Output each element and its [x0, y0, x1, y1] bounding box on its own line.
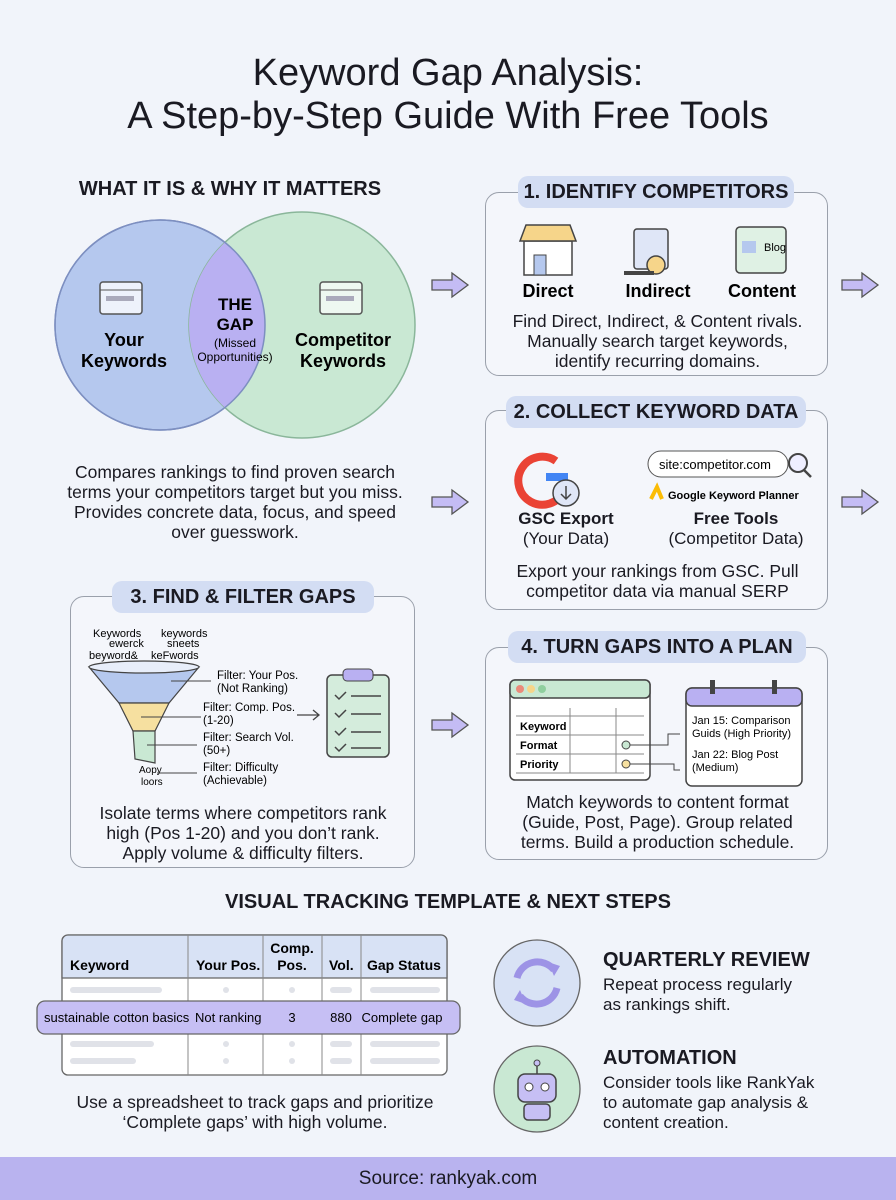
- funnel diagram: (Achievable): [203, 775, 267, 787]
- pill: step 4: [508, 631, 806, 663]
- heading: what it is: WHAT IT IS & WHY IT MATTERS: [79, 178, 381, 200]
- tracking table: 880: [330, 1010, 352, 1025]
- text: quarterly review: as rankings shift.: [603, 995, 731, 1014]
- panel: step 2: Free Tools: [694, 509, 778, 528]
- arrow 1: [431, 272, 469, 298]
- funnel diagram: keFwords: [151, 650, 199, 662]
- title: Keyword Gap Analysis:: [253, 52, 643, 94]
- icons: competitor types: Indirect: [625, 281, 691, 301]
- heading: tracking template: VISUAL TRACKING TEMPLATE & NEXT STEPS: [225, 891, 671, 913]
- venn diagram: Keywords: [81, 351, 167, 371]
- funnel diagram: Filter: Difficulty: [203, 762, 278, 774]
- venn diagram: Your: [104, 330, 144, 350]
- tracking table: Comp.: [270, 940, 314, 956]
- pill: step 2: 2. COLLECT KEYWORD DATA: [514, 401, 798, 423]
- icons: competitor types: Content: [728, 281, 796, 301]
- icons: competitor types: Direct: [522, 281, 574, 301]
- tracking table: Complete gap: [362, 1010, 442, 1025]
- pill: step 1: [518, 176, 794, 208]
- text: quarterly review: QUARTERLY REVIEW: [603, 949, 810, 971]
- funnel diagram: (50+): [203, 745, 230, 757]
- plan mockup: Priority: [520, 759, 559, 771]
- panel: step 2: Export your rankings from GSC. Pull competitor data via manual SERP: [516, 561, 799, 601]
- plan mockup: (Medium): [692, 762, 738, 774]
- pill: step 1: 1. IDENTIFY COMPETITORS: [524, 181, 788, 203]
- tracking table: [36, 934, 461, 1076]
- tracking table: Your Pos.: [196, 957, 260, 973]
- icon: automation robot: [493, 1045, 581, 1133]
- funnel diagram: (1-20): [203, 715, 234, 727]
- funnel diagram: keyword: [117, 660, 158, 672]
- panel: step 2: (Competitor Data): [668, 529, 804, 548]
- plan mockup: Guids (High Priority): [692, 728, 791, 740]
- funnel diagram: Filter: Comp. Pos.: [203, 702, 295, 714]
- plan mockup: Jan 15: Comparison: [692, 715, 790, 727]
- tracking table: Not ranking: [195, 1010, 261, 1025]
- funnel diagram: (Not Ranking): [217, 683, 288, 695]
- funnel diagram: Aopy: [139, 765, 162, 776]
- tracking table: Pos.: [277, 957, 307, 973]
- panel: step 3: Isolate terms where competitors rank high (Pos 1-20) and you don’t rank. Apply volume & difficulty filters.: [100, 803, 386, 863]
- plan mockup: Jan 22: Blog Post: [692, 749, 778, 761]
- funnel diagram: keywords: [161, 628, 208, 640]
- text: automation: [603, 1047, 814, 1132]
- funnel diagram: ewerck: [109, 638, 144, 650]
- icons: competitor types: Blog: [764, 242, 786, 254]
- icons: data sources: site:competitor.com: [659, 457, 771, 472]
- text: quarterly review: Repeat process regularly: [603, 975, 792, 994]
- arrow 5: [431, 712, 469, 738]
- venn diagram: GAP: [217, 315, 253, 334]
- arrow 3: [431, 488, 469, 516]
- panel: step 2: (Your Data): [523, 529, 609, 548]
- text: automation: content creation.: [603, 1113, 729, 1132]
- icon: quarterly review: [493, 939, 581, 1027]
- icons: data sources: Google Keyword Planner: [668, 490, 800, 502]
- panel: step 2: GSC Export: [518, 509, 614, 528]
- plan mockup: [509, 679, 803, 787]
- venn diagram: (Missed: [214, 336, 256, 350]
- funnel diagram: Filter: Search Vol.: [203, 732, 294, 744]
- panel: step 2: [485, 410, 828, 610]
- icons: data sources: [514, 450, 812, 509]
- text: definition: Compares rankings to find proven search terms your competitors target but you miss. Provides concrete data, focus, and speed over guesswork.: [67, 462, 403, 542]
- tracking table: sustainable cotton basics: [44, 1010, 190, 1025]
- arrow 2: [841, 272, 879, 298]
- funnel diagram: beyword&: [89, 650, 139, 662]
- panel: step 1: Find Direct, Indirect, & Content rivals.: [513, 311, 802, 331]
- pill: step 3: [112, 581, 374, 613]
- title: A Step-by-Step Guide With Free Tools: [127, 95, 769, 137]
- icons: competitor types: [519, 224, 796, 301]
- funnel diagram: Filter: Your Pos.: [217, 670, 298, 682]
- panel: step 1: [485, 192, 828, 376]
- panel: step 3: [70, 596, 415, 868]
- tracking table: Gap Status: [367, 957, 441, 973]
- footer: source: Source: rankyak.com: [359, 1168, 537, 1189]
- tracking table: Vol.: [329, 957, 354, 973]
- tracking table: Keyword: [70, 957, 129, 973]
- funnel diagram: sneets: [167, 638, 200, 650]
- plan mockup: Format: [520, 740, 558, 752]
- venn diagram: Competitor: [295, 330, 391, 350]
- arrow 4: [841, 488, 879, 516]
- funnel diagram: loors: [141, 777, 163, 788]
- panel: step 1: Manually search target keywords,: [527, 331, 788, 351]
- text: quarterly review: [603, 949, 810, 1014]
- text: automation: to automate gap analysis &: [603, 1093, 808, 1112]
- funnel diagram: Keywords: [93, 628, 142, 640]
- plan mockup: Keyword: [520, 721, 566, 733]
- text: automation: Consider tools like RankYak: [603, 1073, 814, 1092]
- venn diagram: [54, 211, 416, 439]
- panel: step 4: [485, 647, 828, 860]
- text: automation: AUTOMATION: [603, 1047, 737, 1069]
- text: table caption: Use a spreadsheet to track gaps and prioritize ‘Complete gaps’ with high volume.: [76, 1092, 434, 1132]
- venn diagram: Keywords: [300, 351, 386, 371]
- pill: step 3: 3. FIND & FILTER GAPS: [130, 586, 356, 608]
- venn diagram: Opportunities): [197, 350, 273, 364]
- pill: step 2: [506, 396, 806, 428]
- title: [127, 52, 769, 137]
- panel: step 1: identify recurring domains.: [555, 351, 760, 371]
- venn diagram: THE: [218, 295, 252, 314]
- funnel diagram: [88, 628, 390, 788]
- panel: step 4: Match keywords to content format (Guide, Post, Page). Group related terms. Build a production schedule.: [521, 792, 794, 852]
- pill: step 4: 4. TURN GAPS INTO A PLAN: [521, 636, 793, 658]
- footer: source: [0, 1157, 896, 1200]
- tracking table: 3: [288, 1010, 296, 1025]
